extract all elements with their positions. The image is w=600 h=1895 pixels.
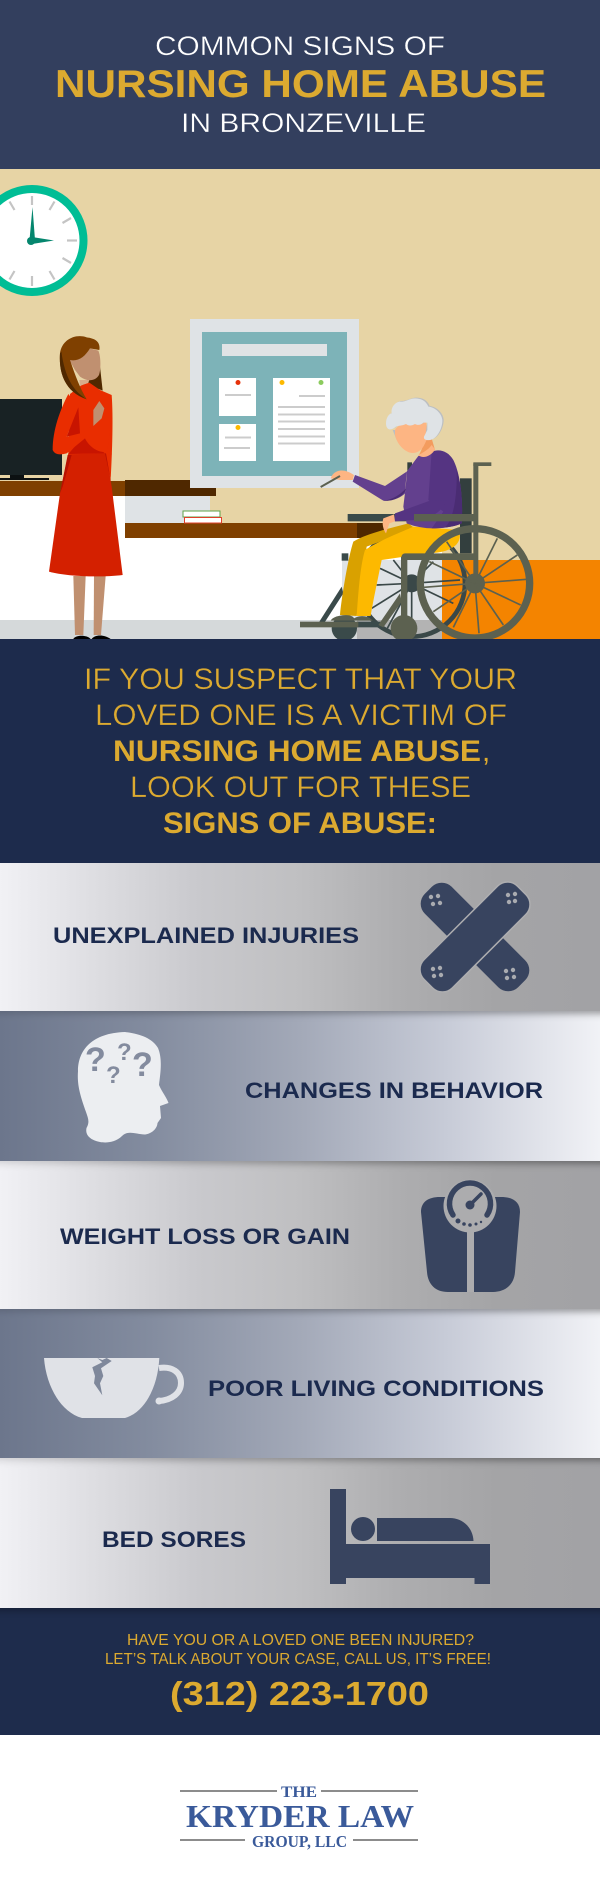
patient hair [387, 398, 444, 440]
logo: the kryder law group: GROUP, LLC [252, 1832, 347, 1851]
icon: head with question marks: ? [106, 1062, 121, 1089]
intro panel: LOOK OUT FOR THESE [130, 771, 471, 804]
logo: the kryder law group: THE [281, 1784, 317, 1801]
logo: the kryder law group: KRYDER LAW [186, 1798, 414, 1834]
intro panel: SIGNS OF ABUSE: [163, 807, 437, 840]
icon: head with question marks: ? [132, 1046, 153, 1084]
panel: bed sores [0, 1452, 600, 1608]
call to action panel: LET’S TALK ABOUT YOUR CASE, CALL US, IT’S FREE! [105, 1651, 491, 1668]
icon: crossed bandages [414, 876, 536, 998]
patient legs [340, 523, 415, 616]
panel: poor living conditions: POOR LIVING CONDITIONS [208, 1376, 544, 1401]
icon: bathroom scale [421, 1180, 520, 1292]
call to action panel [0, 1602, 600, 1735]
panel: unexplained injuries: UNEXPLAINED INJURIES [53, 923, 359, 948]
pen [321, 476, 340, 487]
panel: unexplained injuries [0, 863, 600, 1011]
desk and books [125, 511, 387, 538]
panel: poor living conditions [0, 1303, 600, 1458]
panel: bed sores: BED SORES [102, 1527, 246, 1552]
title line: in bronzeville: IN BRONZEVILLE [181, 108, 426, 138]
logo: the kryder law group [180, 1784, 418, 1851]
title line: nursing home abuse: NURSING HOME ABUSE [55, 63, 546, 106]
woman in red dress [49, 336, 123, 639]
tv on counter [0, 399, 216, 496]
icon: head with question marks: ? [117, 1039, 132, 1066]
panel: changes in behavior [0, 1005, 600, 1161]
intro panel [0, 639, 600, 863]
intro panel: NURSING HOME ABUSE [113, 735, 481, 768]
panel: weight loss or gain [0, 1155, 600, 1309]
icon: person in bed [330, 1489, 490, 1584]
intro panel: , [482, 735, 490, 768]
woman in wheelchair [300, 398, 530, 642]
panel: changes in behavior: CHANGES IN BEHAVIOR [245, 1078, 543, 1103]
call to action panel: HAVE YOU OR A LOVED ONE BEEN INJURED? [127, 1632, 474, 1649]
wheelchair rear parts [319, 462, 472, 641]
icon: head with question marks [78, 1032, 168, 1142]
intro panel: LOVED ONE IS A VICTIM OF [95, 699, 507, 732]
title line: common signs of: COMMON SIGNS OF [155, 31, 445, 61]
panel: weight loss or gain: WEIGHT LOSS OR GAIN [60, 1224, 350, 1249]
intro panel: IF YOU SUSPECT THAT YOUR [84, 663, 517, 696]
notice board [190, 319, 359, 488]
icon: cracked cup [44, 1358, 181, 1418]
patient torso [403, 452, 462, 528]
patient skin [331, 470, 354, 480]
phone number: (312) 223-1700 [170, 1675, 429, 1712]
wheelchair front parts [300, 462, 491, 642]
room background [0, 169, 600, 639]
illustration: nursing home room [0, 169, 600, 642]
icon: head with question marks: ? [85, 1041, 106, 1079]
icon: wall clock [0, 189, 84, 292]
header panel [0, 0, 600, 169]
